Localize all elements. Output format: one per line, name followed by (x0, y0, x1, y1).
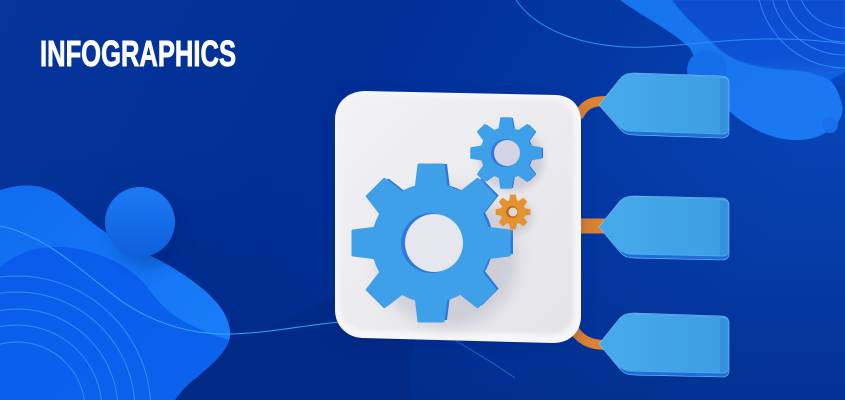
connector: bottom (572, 327, 606, 345)
decorative ball: left (105, 187, 181, 267)
medium gear hole (491, 139, 519, 167)
concentric rings: top right (759, 0, 845, 68)
large gear face (353, 165, 509, 321)
large gear hole (401, 213, 461, 273)
panel (335, 91, 581, 347)
tag: bottom (599, 313, 729, 377)
decorative ball: small right (822, 117, 838, 133)
connector: middle (578, 218, 606, 234)
icon: large gear (353, 164, 518, 328)
title: INFOGRAPHICS (40, 33, 236, 74)
medium gear face (471, 118, 541, 188)
blob: inner bottom left (0, 247, 229, 400)
flowing line: lower middle (455, 340, 515, 378)
blob: bottom left (0, 185, 230, 400)
flowing line: top right (516, 0, 845, 47)
tag: top (599, 73, 729, 138)
blob: top right darker area (672, 0, 845, 86)
dark wave shape behind panel (175, 297, 420, 400)
decorative ball: behind top tag (687, 50, 727, 90)
connector: top (578, 101, 606, 117)
medium gear depth (473, 118, 543, 188)
flowing line: left (0, 226, 340, 334)
icon: small orange gear (496, 195, 533, 233)
concentric rings: bottom left (0, 276, 151, 400)
small gear hole (506, 206, 518, 218)
blob: top right (620, 0, 845, 140)
icon: medium gear (471, 118, 544, 192)
large gear depth (357, 164, 513, 320)
small gear face (496, 195, 530, 229)
tag: middle (599, 196, 729, 260)
